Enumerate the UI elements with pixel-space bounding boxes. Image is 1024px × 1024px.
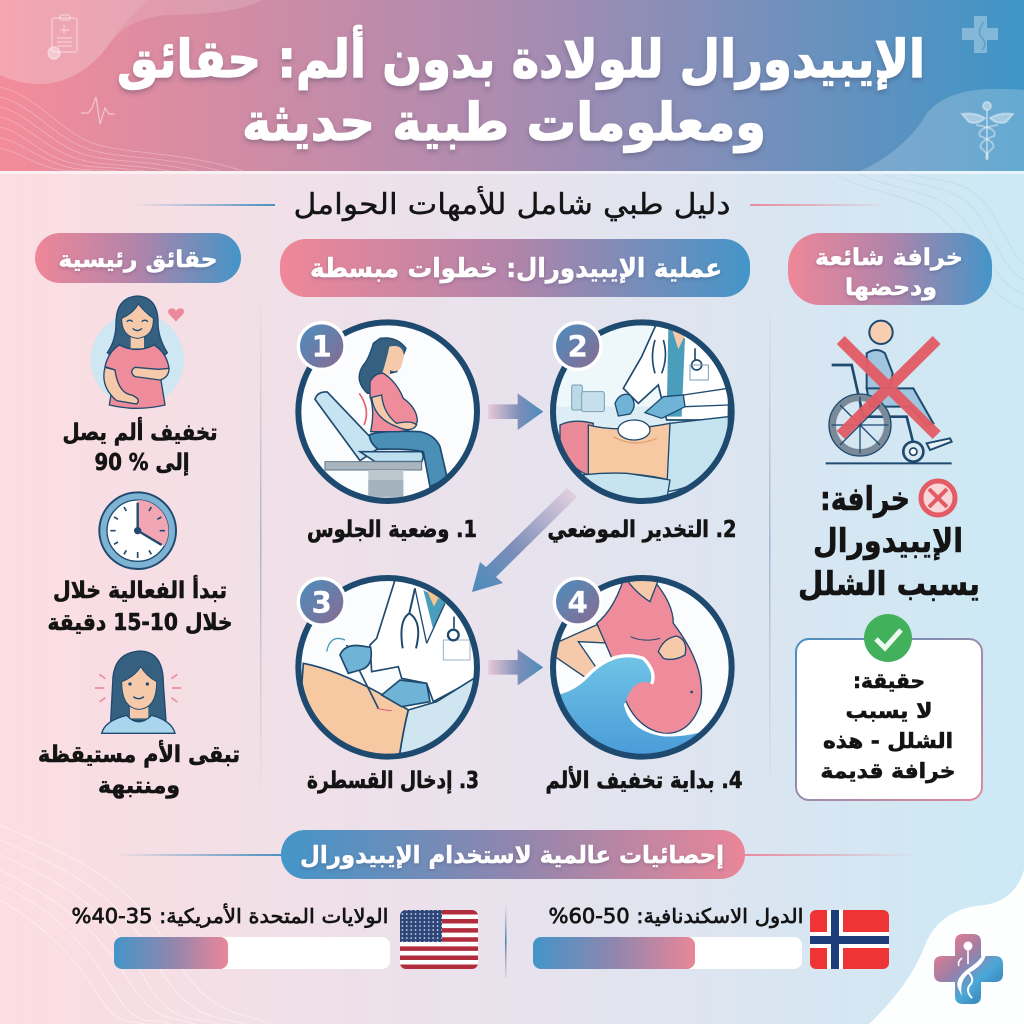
icon: red x — [921, 481, 955, 515]
fact: pain relief: تخفيف ألم يصل — [62, 416, 218, 446]
title: ومعلومات طبية حديثة — [242, 93, 766, 153]
icon: green check — [864, 614, 912, 662]
logo — [934, 934, 1003, 1004]
heading: statistics: إحصائيات عالمية لاستخدام الإيبيدورال — [300, 841, 724, 869]
heading: key facts: حقائق رئيسية — [58, 247, 218, 273]
myth statement: خرافة: — [820, 479, 910, 519]
column divider left — [260, 290, 262, 800]
step 3 illustration — [297, 577, 480, 757]
badge 1 — [298, 323, 345, 369]
arrow 3 to 4 — [488, 649, 543, 685]
heading: steps — [280, 239, 750, 297]
badge 2 — [554, 323, 601, 369]
heading: myth: ودحضها — [845, 275, 937, 301]
step 2 illustration — [552, 322, 732, 501]
caption step 2: 2. التخدير الموضعي — [548, 517, 736, 543]
icon: medical cross — [962, 16, 998, 53]
myth statement: يسبب الشلل — [798, 564, 980, 603]
step 1 illustration — [298, 322, 477, 501]
myth statement: الإيبيدورال — [813, 521, 963, 561]
fact box: خرافة قديمة — [820, 759, 956, 783]
icon: clock — [99, 492, 176, 569]
icon: USA flag — [400, 910, 478, 969]
panel: epidural steps — [280, 239, 750, 794]
heading: statistics — [115, 830, 917, 879]
fact: stays awake: ومنتبهة — [98, 773, 180, 799]
icon: crossed wheelchair — [826, 321, 952, 463]
myth statement — [798, 479, 980, 603]
subtitle: دليل طبي شامل للأمهات الحوامل — [294, 185, 730, 222]
bar: 35-40% — [114, 937, 390, 969]
arrow 1 to 2 — [488, 393, 543, 430]
icon: Norway flag — [810, 910, 889, 969]
header banner — [0, 0, 1024, 174]
fact: stays awake: تبقى الأم مستيقظة — [38, 739, 240, 768]
arrow 2 to 3 — [472, 488, 577, 592]
badge 3 — [298, 578, 345, 625]
title — [117, 25, 925, 153]
badge 3: 3 — [311, 585, 332, 619]
stat: Scandinavia: الدول الاسكندنافية: 50-60% — [548, 904, 804, 928]
heading: myth: خرافة شائعة — [815, 245, 963, 271]
fact: onset time: تبدأ الفعالية خلال — [53, 574, 227, 604]
fact: onset time: خلال 10-15 دقيقة — [48, 610, 232, 636]
badge 2: 2 — [567, 330, 588, 364]
fact: pain relief — [62, 416, 218, 476]
fact box: لا يسبب — [846, 699, 932, 723]
icon: caduceus — [962, 102, 1013, 160]
fact box — [796, 614, 982, 800]
title: الإيبيدورال للولادة بدون ألم: حقائق — [117, 25, 925, 90]
panel: key facts — [35, 233, 241, 799]
badge 1: 1 — [311, 330, 332, 364]
fact box: الشلل - هذه — [823, 729, 953, 753]
icon: awake mother — [95, 651, 181, 733]
panel: global statistics — [72, 830, 917, 978]
stat: Scandinavia — [533, 904, 889, 969]
step 4 illustration — [553, 578, 732, 757]
badge 4 — [554, 578, 601, 625]
fact: onset time — [48, 574, 232, 636]
caption step 1: 1. وضعية الجلوس — [307, 517, 477, 543]
icon: pregnant woman — [91, 296, 184, 408]
badge 4: 4 — [567, 585, 588, 619]
caption step 3: 3. إدخال القسطرة — [307, 768, 479, 794]
fact: pain relief: إلى % 90 — [94, 450, 190, 476]
stat: United States: الولايات المتحدة الأمريكية: 35-40% — [72, 904, 388, 928]
caption step 4: 4. بداية تخفيف الألم — [546, 765, 742, 794]
icon: clipboard — [48, 15, 77, 59]
heading: steps: عملية الإيبيدورال: خطوات مبسطة — [310, 254, 722, 284]
fact box: حقيقة: — [853, 669, 925, 693]
heading: myth — [788, 233, 992, 305]
fact: stays awake — [38, 739, 240, 799]
icon: heartbeat — [81, 97, 115, 124]
heading: key facts — [35, 233, 241, 283]
bar: 50-60% — [533, 937, 802, 969]
stat: United States — [72, 904, 478, 969]
panel: myth and fact — [788, 233, 992, 800]
